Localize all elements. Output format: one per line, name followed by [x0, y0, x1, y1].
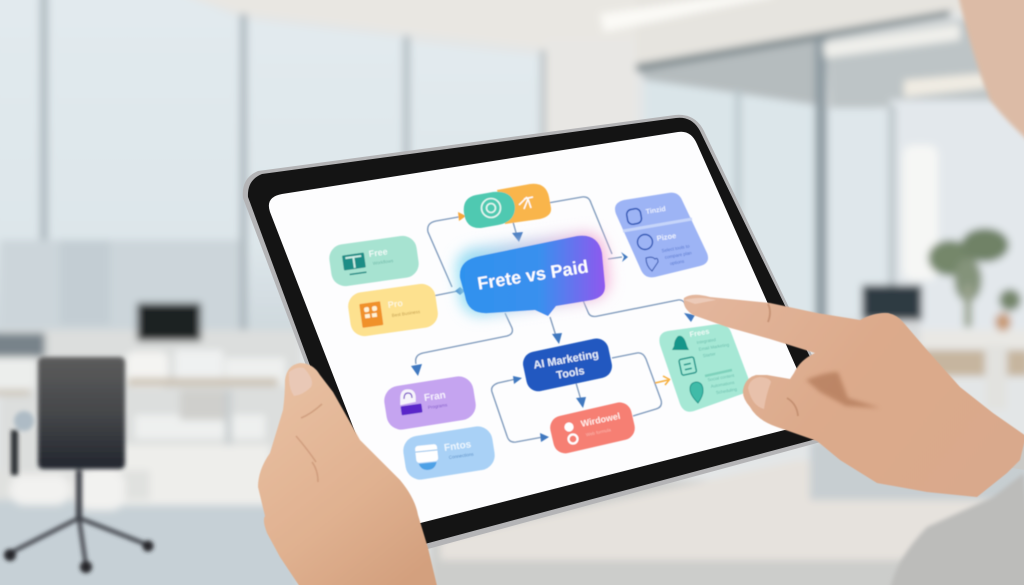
- node: Wirdowel: [548, 400, 637, 456]
- node: Fntos: [401, 424, 497, 482]
- watch band: [1012, 438, 1024, 470]
- tablet silver frame: [243, 115, 850, 562]
- label: Wirdowel: [580, 411, 621, 429]
- label: Frees: [689, 327, 710, 339]
- caption: Social content: [707, 373, 735, 382]
- knuckle creases: [296, 404, 322, 482]
- caption: Scheduling: [716, 386, 738, 395]
- node: AI Marketing Tools: [521, 336, 614, 394]
- node: mint panel: [659, 324, 750, 412]
- orange arrows: [458, 212, 670, 385]
- label: Pro: [387, 298, 404, 310]
- knuckle creases: [768, 304, 798, 416]
- right hand: [684, 295, 1024, 497]
- node: Fran: [382, 374, 478, 432]
- label: AI Marketing: [533, 348, 600, 372]
- label: Fran: [423, 390, 446, 404]
- arrowheads: [411, 232, 695, 442]
- node: Free: [328, 234, 420, 288]
- icon: list: [679, 357, 697, 375]
- label: Pizoe: [656, 231, 677, 243]
- icon: pin: [566, 424, 578, 444]
- shadow between thumb and index: [806, 372, 880, 408]
- tablet black bezel: [248, 118, 846, 556]
- caption: Workflows: [372, 258, 394, 266]
- tablet: [243, 115, 850, 562]
- left hand: [258, 363, 438, 585]
- icon: chart: [519, 197, 533, 209]
- sleeve: [890, 473, 1024, 585]
- caption: options: [670, 259, 685, 266]
- tablet screen: [269, 132, 820, 530]
- label: Fntos: [443, 439, 472, 454]
- icon: card: [415, 444, 439, 471]
- icon: badge: [626, 208, 642, 225]
- thumb nail: [289, 368, 312, 396]
- icon: bell: [672, 336, 689, 350]
- icon: pro: [359, 301, 383, 328]
- icon: target: [482, 198, 500, 218]
- caption: Programs: [428, 402, 448, 410]
- icon: lock: [401, 390, 423, 415]
- thumb nail: [748, 377, 771, 409]
- label: Free: [368, 246, 388, 259]
- flowchart on screen: [328, 184, 750, 482]
- icon: free: [342, 253, 367, 276]
- node glow: [454, 230, 612, 318]
- caption: Select tools to: [661, 243, 690, 253]
- caption: Integrated: [696, 337, 717, 345]
- icon: map pin: [690, 382, 703, 403]
- icon: heart: [646, 257, 658, 271]
- caption: Connections: [448, 451, 475, 460]
- caption: Best Business: [391, 309, 421, 318]
- title text: Frete vs Paid: [476, 256, 590, 294]
- label: Tinzid: [645, 206, 666, 216]
- blurred foreground shoulder: [957, 0, 1024, 146]
- caption: Automations: [710, 380, 735, 389]
- caption: Starter: [702, 351, 716, 358]
- finger highlight: [684, 298, 716, 304]
- node: Pro: [346, 282, 440, 338]
- label: Tools: [555, 365, 586, 382]
- caption: compare plan: [664, 250, 693, 260]
- node: periwinkle panel: [615, 193, 708, 277]
- caption: Email Marketing: [698, 342, 730, 352]
- office chair: [4, 357, 154, 573]
- icon: eye: [638, 234, 652, 250]
- node: top pill teal and orange: [464, 184, 551, 228]
- connectors: [416, 197, 688, 442]
- node: Free vs Paid: [460, 236, 605, 316]
- caption: Web formula: [585, 427, 612, 437]
